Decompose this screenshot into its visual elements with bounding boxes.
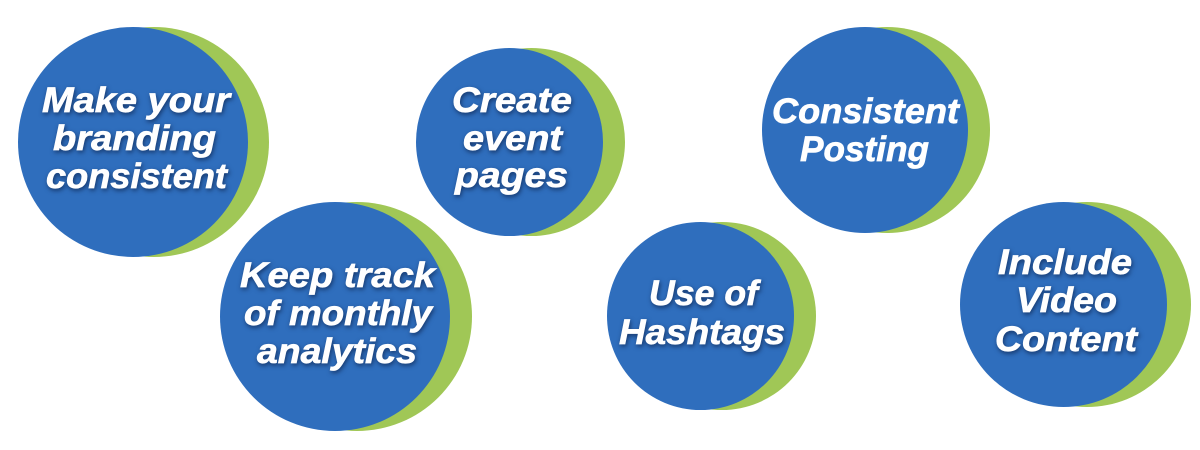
label: Keep track of monthly analytics: Keep track [240, 256, 437, 295]
badge: Consistent Posting [762, 27, 990, 233]
green crescent [628, 222, 816, 410]
green crescent [242, 202, 472, 431]
label: Include Video Content: Include [998, 243, 1132, 282]
green crescent [438, 48, 625, 236]
label: Create event pages [452, 81, 572, 195]
badge: Include Video Content [960, 202, 1191, 407]
badge: Keep track of monthly analytics [220, 202, 472, 431]
label: Keep track of monthly analytics [240, 256, 437, 371]
label: Make your branding consistent: consistent [46, 157, 228, 196]
label: Create event pages: pages [454, 156, 568, 195]
label: Include Video Content: Video [1016, 281, 1117, 320]
green crescent [784, 27, 990, 233]
label: Make your branding consistent: branding [53, 119, 216, 158]
label: Create event pages: Create [452, 81, 572, 120]
label: Use of Hashtags: Use of [649, 274, 761, 313]
label: Make your branding consistent: Make your [42, 81, 233, 120]
label: Include Video Content: Content [995, 320, 1138, 359]
label: Use of Hashtags: Hashtags [619, 313, 785, 352]
badge: Use of Hashtags [607, 222, 816, 410]
blue disc [762, 27, 968, 233]
blue disc [18, 27, 248, 257]
label: Use of Hashtags [619, 274, 785, 352]
blue disc [220, 202, 450, 431]
blue disc [416, 48, 603, 236]
badge: Create event pages [416, 48, 625, 236]
blue disc [607, 222, 794, 410]
blue disc [960, 202, 1167, 407]
label: Keep track of monthly analytics: analytics [257, 332, 417, 371]
label: Consistent Posting: Consistent [772, 92, 960, 131]
badge: Make your branding consistent [18, 27, 269, 257]
label: Include Video Content [995, 243, 1138, 359]
green crescent [39, 27, 269, 257]
label: Consistent Posting [772, 92, 960, 169]
green crescent [983, 202, 1191, 407]
label: Make your branding consistent [42, 81, 233, 196]
label: Create event pages: event [463, 119, 563, 158]
label: Keep track of monthly analytics: of monthly [244, 294, 434, 333]
label: Consistent Posting: Posting [800, 130, 929, 169]
